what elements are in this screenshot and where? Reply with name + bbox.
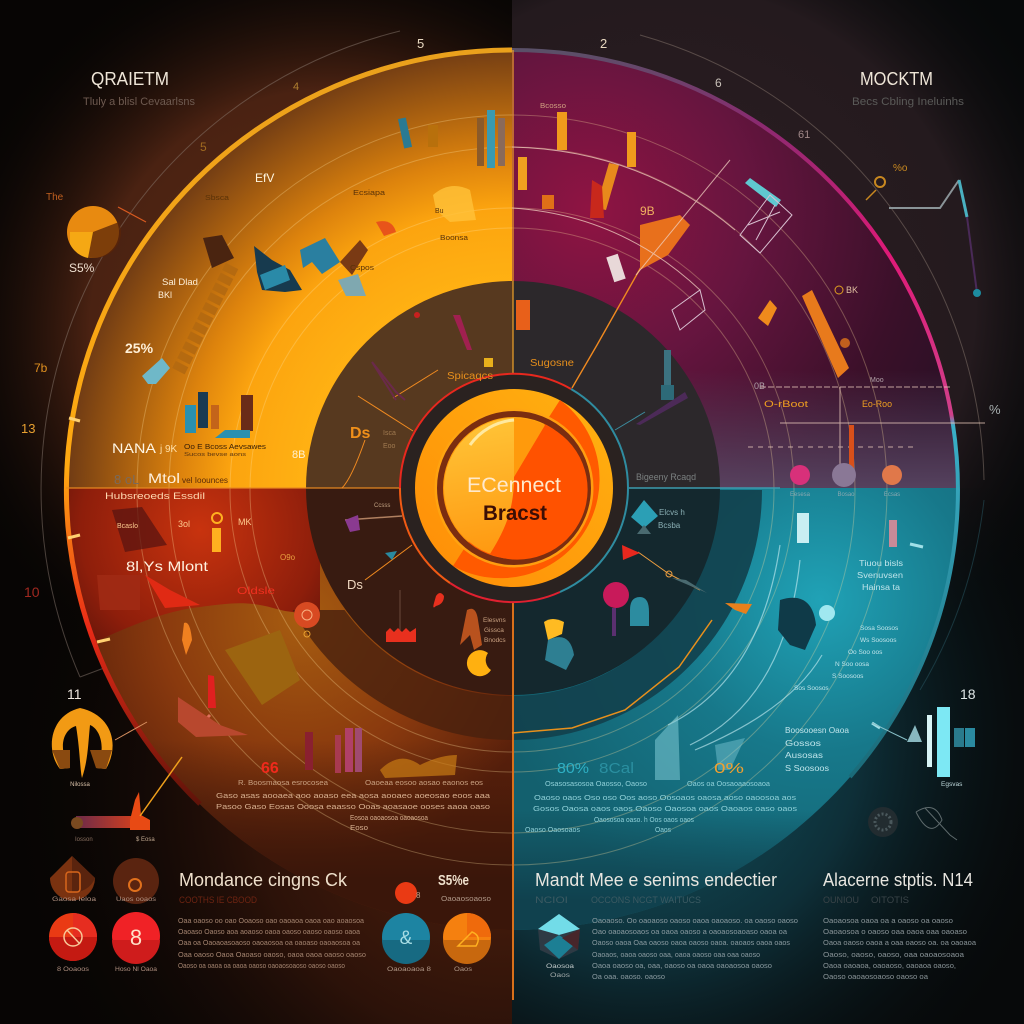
block: alacerne text: OITOTIS bbox=[871, 895, 909, 905]
heading: top right: MOCKTM bbox=[860, 69, 933, 89]
top numerals and side numbers: 5 bbox=[417, 36, 424, 51]
paragraph: mandt: Oaoa oaoso oa, oaa, oaoso oa oaoa oaoaosoa oaoso bbox=[592, 961, 772, 970]
icon: lower left slider: $ Eosa bbox=[136, 837, 155, 843]
chair shaped icons bbox=[203, 221, 396, 296]
paragraph: alacerne: Oaoa oaoso oaoa a oaa oaoso oa. oa oaoaoa bbox=[823, 938, 977, 947]
paragraph: alacerne: Oaoso oaoaosoaoso oaoso oa bbox=[823, 972, 929, 981]
heading: NANA: NANA bbox=[112, 440, 157, 456]
panel: teal bottom-right quadrant bbox=[512, 488, 958, 930]
teal labels: Tiuou bisls bbox=[859, 559, 903, 568]
block: mondance text bbox=[178, 870, 366, 970]
icon: top left pie: S5% bbox=[69, 261, 95, 275]
heading: top left bbox=[83, 69, 195, 108]
teal caption lines: Oaos oa Oosaoaaosoaoa bbox=[687, 781, 770, 788]
top numerals and side numbers: 18 bbox=[960, 686, 976, 702]
heading: top right bbox=[852, 69, 965, 108]
heading: mondance: Mondance cingns Ck bbox=[179, 870, 348, 890]
icon: yellow head figure bbox=[544, 619, 574, 670]
teal circuit arcs bbox=[668, 545, 822, 750]
bottom left captions: Eosoa oaoaosoa oaoaosoa bbox=[350, 815, 428, 822]
three status circles bbox=[790, 463, 902, 498]
three status circles: Bosao bbox=[837, 492, 855, 498]
teal labels: N Soo oosa bbox=[835, 661, 869, 668]
panel details: red and brown quadrant bbox=[97, 491, 490, 832]
icon: tower bbox=[636, 350, 688, 425]
three status circles: Eesesa bbox=[790, 492, 811, 498]
inner circle icons and notes bbox=[345, 300, 707, 676]
subheading: top right: Becs Cbling Ineluinhs bbox=[852, 96, 965, 108]
icon: orange figure bbox=[460, 609, 507, 676]
middle ring bbox=[400, 374, 628, 602]
center title: ECennect bbox=[467, 474, 561, 497]
note: top orange caption bbox=[414, 300, 574, 382]
top numerals and side numbers: % bbox=[989, 402, 1001, 417]
icon: purple arrow bbox=[345, 503, 397, 592]
subheading: mandt: NCIOI bbox=[535, 895, 568, 905]
teal caption lines: Oaos bbox=[655, 827, 671, 834]
top numerals and side numbers: 6 bbox=[715, 76, 722, 90]
icons: bottom left red circles: Hoso Nl Oaoa bbox=[115, 966, 157, 973]
heading: top left: QRAIETM bbox=[91, 69, 169, 89]
icons: bottom left domes bbox=[50, 856, 159, 904]
icon: teal diamond: Elcvs h bbox=[659, 508, 685, 517]
note: top orange caption: Sugosne bbox=[530, 358, 574, 369]
top numerals and side numbers: 2 bbox=[600, 36, 607, 51]
labels and keys: O-rBoot bbox=[764, 399, 809, 409]
block: mandt text bbox=[535, 870, 798, 981]
icon: orange figure: Gissca bbox=[484, 627, 504, 634]
paragraph: mandt: Oa oaa. oaoso. oaoso bbox=[592, 972, 665, 981]
icon: lower left horn bbox=[52, 708, 147, 788]
tilted panel bbox=[142, 358, 170, 384]
bottom left captions bbox=[216, 780, 490, 832]
thin guide lines bbox=[512, 147, 985, 465]
ring ticks bbox=[68, 418, 923, 728]
note: top orange caption: Spicaqcs bbox=[447, 371, 493, 382]
stat: 55 percent with red dot bbox=[395, 872, 491, 904]
icon: orange glyph notes bbox=[350, 425, 396, 450]
brown panel figures: 66 bbox=[261, 760, 279, 777]
subheading: alacerne: OUNIOU bbox=[823, 895, 859, 905]
teal bars bbox=[655, 513, 897, 780]
heading: 25 percent: 25% bbox=[125, 340, 154, 356]
block: mandt text: OCCONS NCGT WAITUCS bbox=[591, 895, 701, 905]
labels and keys: 9B bbox=[640, 204, 655, 218]
subheading: top left: Tluly a blisl Cevaarlsns bbox=[83, 96, 195, 108]
scattered notes: Bu bbox=[435, 208, 444, 215]
panel: maroon top-right quadrant bbox=[512, 50, 958, 488]
outer thin guide ring bbox=[41, 31, 984, 690]
icon: red flag bbox=[622, 545, 707, 593]
icon: lower right bars bbox=[872, 707, 975, 788]
label: EHV: EfV bbox=[255, 171, 274, 185]
top numerals and side numbers: 5 bbox=[200, 140, 207, 154]
icons: bottom left red circles: 8 Ooaoos bbox=[57, 966, 90, 973]
paragraph: mondance: Oaa oa Oaoaoasoaoso oaoaosoa oa oaoaso oaoaosoa oa bbox=[178, 938, 361, 947]
teal labels: Boosooesn Oaoa bbox=[785, 726, 850, 735]
inner dark circle bbox=[306, 281, 720, 695]
bottom left captions: Pasoo Gaso Eosas Ooosa eaasso Ooas aoasaoe ooses aaoa oaso bbox=[216, 804, 490, 811]
bottom left captions: Eoso bbox=[350, 825, 368, 832]
labels and keys: Moo bbox=[870, 377, 884, 384]
teal caption lines: Osasosasosoa Oaosso, Oaoso bbox=[545, 781, 647, 788]
heading: red banner caption: Hubsreoeds Essdil bbox=[105, 491, 205, 501]
teal labels: Svenuvsen bbox=[857, 571, 903, 580]
teal labels: Gossos bbox=[785, 739, 821, 748]
paragraph: mandt: Oaoaoso. Oo oaoaoso oaoso oaoa oaoaoso. oa oaoso oaoso bbox=[592, 916, 798, 925]
heading: MI ttel: Mtol bbox=[148, 470, 180, 486]
central orange blob bbox=[640, 215, 690, 270]
icon: magenta ball bbox=[603, 582, 649, 636]
concentric guide arcs bbox=[137, 115, 887, 865]
top numerals and side numbers: 61 bbox=[798, 129, 810, 141]
scattered notes: Boonsa bbox=[440, 235, 468, 242]
orange path line bbox=[512, 620, 712, 733]
icons: bottom left domes: Uaos ooaos bbox=[116, 897, 156, 903]
panel details: orange quadrant: BKl bbox=[158, 290, 172, 300]
teal tower icons bbox=[185, 392, 253, 438]
paragraph: mondance: Oaoaso Oaoso aoa aoaoso oaoa oaoso oaoso oaoso oaoa bbox=[178, 927, 361, 936]
center badge bbox=[415, 389, 613, 587]
bottom left captions: Oaoeaa eosoo aosao eaonos eos bbox=[365, 780, 484, 787]
icon: top left pie: The bbox=[46, 192, 64, 203]
teal labels: S Soosoos bbox=[832, 673, 864, 680]
subheading: mondance: COOTHS IE CBOOD bbox=[179, 895, 257, 905]
icon: purple arrow: Ccsss bbox=[374, 503, 390, 509]
icon: purple arrow: Ds bbox=[347, 577, 363, 592]
note: red panel icons: O9o bbox=[280, 553, 296, 562]
heading: mandt: Mandt Mee e senims endectier bbox=[535, 870, 777, 890]
scattered notes: Cspos bbox=[350, 265, 375, 272]
diagonal band of squares bbox=[178, 266, 232, 372]
panel details: orange quadrant bbox=[112, 110, 505, 487]
brown panel figures bbox=[178, 623, 457, 778]
icon: lower left horn: Nilossa bbox=[70, 782, 90, 788]
icons: bottom middle circles: & bbox=[400, 928, 413, 949]
panel details: teal quadrant bbox=[512, 513, 903, 834]
panel details: maroon quadrant bbox=[512, 103, 985, 498]
labels and keys: 0B bbox=[754, 381, 765, 391]
labels and keys: Bcosso bbox=[540, 103, 566, 110]
panel details: orange quadrant: vel Ioounces bbox=[182, 476, 228, 485]
icons: bottom middle circles: Oaos bbox=[454, 966, 473, 973]
icon: teal diamond: Bcsba bbox=[658, 521, 681, 530]
icons: bottom middle circles bbox=[382, 913, 491, 973]
paragraph: mondance: Oaa oaoso oo oao Ooaoso oao oaoaoa oaoa oao aoaosoa bbox=[178, 916, 365, 925]
paragraph: alacerne: Oaoso, oaoso, oaoso, oaa oaoaosoaoa bbox=[823, 950, 965, 959]
note: red panel icons: 3ol bbox=[178, 519, 190, 529]
scattered notes bbox=[205, 190, 468, 461]
icon: lower left slider bbox=[71, 757, 182, 843]
top numerals and side numbers: 10 bbox=[24, 584, 40, 600]
teal caption lines: Oaoso Oaosoaos bbox=[525, 827, 580, 834]
top numerals and side numbers bbox=[21, 36, 1001, 702]
icon: orange glyph notes: Eoo bbox=[383, 443, 396, 450]
teal caption lines: Oaososoa oaso. h Oos oaos oaos bbox=[594, 817, 694, 824]
heading: 80 percent: 80% bbox=[557, 760, 589, 777]
note: red panel icons bbox=[97, 507, 296, 610]
icon: teal diamond bbox=[631, 500, 685, 534]
paragraph: mandt: Oaoso oaoa Oaa oaoso oaoa oaoso oaoa. oaoaos oaoa oaos bbox=[592, 938, 790, 947]
icon: hexagon gem bbox=[538, 914, 580, 979]
heading: 6 percent: 0% bbox=[714, 760, 744, 777]
label: Sal Dad: Sal Dlad bbox=[162, 277, 198, 288]
teal labels: Ws Soosoos bbox=[860, 637, 897, 644]
icons: bottom left red circles: 8 bbox=[130, 925, 142, 950]
teal caption lines: Gosos Oaosa oaos oaos Oaoso Oaosoa oaos Oaoaos oaso oaos bbox=[533, 806, 798, 813]
panel details: orange quadrant: Sucos bevse aons bbox=[184, 452, 246, 458]
tags bbox=[606, 178, 854, 475]
icons: bottom middle circles: Oaoaoaoa 8 bbox=[387, 966, 431, 973]
icon: lower right line globes bbox=[868, 807, 957, 840]
teal caption lines: Oaoso oaos Oso oso Oos aoso Oosoaos oaosa aoso oaoosoa aos bbox=[534, 795, 797, 802]
outer ring left arc bbox=[66, 50, 512, 804]
stat: 55 percent with red dot: Oaoaosoaoso bbox=[441, 896, 491, 903]
chart: top right line bbox=[866, 163, 981, 297]
panel details: orange quadrant: 8 oL bbox=[114, 472, 139, 487]
paragraph: mondance: Oaoso oa oaoa oa oaoa oaoso oaoaosoaoso oaoso oaoso bbox=[178, 961, 345, 970]
bar clusters bbox=[398, 110, 505, 168]
teal labels: Hainsa ta bbox=[862, 583, 901, 592]
labels and keys: Eo-Roo bbox=[862, 399, 892, 409]
heading: Mlont: 8l,Ys Mlont bbox=[126, 558, 208, 574]
chart: top right line: %o bbox=[893, 163, 908, 174]
icon: orange figure: Bnodcs bbox=[484, 637, 506, 644]
paragraph: mandt bbox=[592, 916, 798, 981]
icon: orange figure: Elesvns bbox=[483, 617, 507, 624]
icon: top left pie bbox=[46, 192, 146, 275]
icon: hexagon gem: Oaosoa bbox=[546, 963, 574, 970]
top numerals and side numbers: 13 bbox=[21, 421, 35, 436]
teal labels bbox=[785, 559, 903, 773]
teal labels: Oo Soo oos bbox=[848, 649, 883, 656]
bottom left captions: R. Boosmaosa esrocosea bbox=[238, 780, 328, 787]
teal labels: Sosa Soosos bbox=[860, 625, 899, 632]
paragraph: mondance: Oaa oaoso Oaoa Oaoaso oaoso, oaoa oaoa oaoso oaoso bbox=[178, 950, 366, 959]
connector lines in inner circle bbox=[342, 260, 700, 590]
icon: red comb bbox=[386, 590, 444, 642]
bottom left captions: Gaso asas aooaea aoo aoaso eea aosa aooaeo aoeosao eoos aaa bbox=[216, 793, 490, 800]
stat: 55 percent with red dot: S5%e bbox=[438, 872, 469, 889]
note: red panel icons: Oldsle bbox=[237, 586, 276, 597]
teal labels: Ausosas bbox=[785, 751, 823, 760]
paragraph: alacerne bbox=[823, 916, 977, 981]
paragraph: mandt: Oaoaos, oaoa oaoso oaa, oaoa oaoso oaa oaa oaoso bbox=[592, 950, 760, 959]
orange marker bbox=[725, 603, 752, 614]
band darkening around the inner circle, lower left bbox=[292, 610, 512, 740]
labels and keys: BK bbox=[846, 285, 858, 295]
icons: bottom left red circles bbox=[49, 912, 160, 973]
top numerals and side numbers: 7b bbox=[34, 361, 48, 375]
icon: hexagon gem: Oaos bbox=[550, 972, 571, 979]
icon: lower left slider: Iosson bbox=[75, 837, 93, 843]
paragraph: mandt: Oao oaoaosoaos oa oaoa oaoso a oaoaosoaoaso oaoa oa bbox=[592, 927, 788, 936]
teal labels: S Soosoos bbox=[785, 764, 829, 773]
teal caption lines bbox=[525, 781, 798, 834]
teal labels: Sos Soosos bbox=[794, 685, 829, 692]
note: right label: Bigeeny Rcaqd bbox=[636, 472, 696, 482]
note: red panel icons: Bcaslo bbox=[117, 523, 138, 530]
top numerals and side numbers: 4 bbox=[293, 81, 299, 93]
top numerals and side numbers: 11 bbox=[67, 686, 82, 702]
icon: orange medallion bbox=[294, 602, 320, 637]
scattered notes: 8B bbox=[292, 449, 305, 461]
note: red panel icons: MK bbox=[238, 517, 252, 527]
heading: alacerne: Alacerne stptis. N14 bbox=[823, 870, 973, 890]
orange blob top right bbox=[433, 186, 476, 222]
axis lines bbox=[66, 50, 780, 1000]
block: alacerne text bbox=[823, 870, 977, 981]
icon: lower right bars: Egsvas bbox=[941, 781, 963, 788]
paragraph: mondance bbox=[178, 916, 366, 970]
scattered notes: Sbsca bbox=[205, 195, 229, 202]
outer ring right arc bbox=[512, 50, 958, 777]
scattered notes: Ecsiapa bbox=[353, 190, 385, 197]
paragraph: alacerne: Oaoaosoa oaoa oa a oaoso oa oaoso bbox=[823, 916, 953, 925]
panel: brown bottom-left quadrant bbox=[66, 488, 512, 930]
teal figure bbox=[778, 598, 835, 650]
paragraph: alacerne: Oaoaosoa o oaoso oaa oaoa oaa oaoaso bbox=[823, 927, 967, 936]
network glyphs bbox=[672, 195, 792, 330]
panel: orange top-left quadrant bbox=[66, 50, 512, 488]
orange bars bbox=[518, 112, 636, 218]
center subtitle: Bracst bbox=[483, 502, 547, 525]
paragraph: alacerne: Oaoa oaoaoa, oaoaoso, oaoaoa oaoso, bbox=[823, 961, 956, 970]
panel: red wave band bbox=[69, 488, 320, 642]
icons: bottom left domes: Gaosa Ieloa bbox=[52, 897, 97, 903]
icon: orange glyph notes: Isca bbox=[383, 430, 396, 437]
panel details: teal quadrant: 8Cal bbox=[599, 760, 634, 777]
label: NANA side: j 9K bbox=[159, 444, 178, 455]
three status circles: Ecsas bbox=[884, 492, 900, 498]
icon: orange glyph notes: Ds bbox=[350, 425, 371, 442]
labels and keys bbox=[540, 103, 892, 409]
stat: 55 percent with red dot: 8 bbox=[416, 891, 421, 900]
panel details: orange quadrant: Oo E Bcoss Aevsawes bbox=[184, 444, 267, 451]
